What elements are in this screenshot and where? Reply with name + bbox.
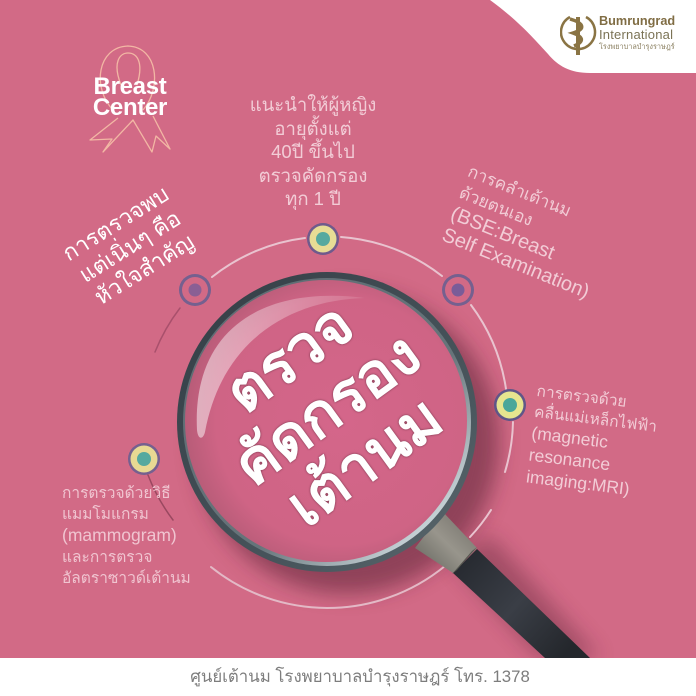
handle shadow (450, 535, 600, 658)
magnifier handle (415, 512, 590, 658)
text: early detection is key (58, 181, 199, 310)
text: mammogram (62, 484, 191, 587)
text: breast self examination: ด้วยตนเอง (457, 183, 536, 230)
text: breast self examination (439, 162, 592, 303)
bumrungrad logo: Bumrungrad (599, 14, 675, 28)
footer bar (0, 658, 696, 696)
text: MRI: คลื่นแม่เหล็กไฟฟ้า (533, 404, 658, 436)
white logo corner (490, 0, 696, 73)
footer bar: ศูนย์เต้านม โรงพยาบาลบำรุงราษฎร์ โทร. 1378 (190, 667, 530, 686)
node: top (307, 223, 339, 255)
node: lower left (128, 443, 160, 475)
breast center logo text: Center (93, 94, 167, 121)
text: mammogram: (mammogram) (62, 525, 177, 545)
lens drop shadow (195, 290, 499, 594)
main title in lens (213, 290, 454, 540)
text: MRI: imaging:MRI) (525, 466, 631, 499)
text: breast self examination: การคลำเต้านม (465, 162, 574, 221)
ribbon icon (90, 46, 170, 152)
text: breast self examination: Self Examination) (439, 224, 592, 303)
main title in lens: ตรวจ (213, 290, 365, 426)
text: breast self examination: (BSE:Breast (448, 203, 558, 264)
text: MRI: resonance (528, 445, 611, 474)
breast center logo text: Breast (94, 73, 166, 100)
dotted ring arcs (148, 237, 513, 608)
text: annual screening advice: แนะนำให้ผู้หญิง (250, 94, 376, 115)
bumrungrad logo: International (599, 27, 673, 42)
text: mammogram: และการตรวจ (62, 549, 152, 566)
text: annual screening advice: ตรวจคัดกรอง (259, 164, 367, 186)
text: early detection is key: แต่เนิ่นๆ คือ (75, 206, 185, 287)
text: annual screening advice (250, 94, 376, 210)
bumrungrad logo: โรงพยาบาลบำรุงราษฎร์ (599, 42, 675, 51)
main title in lens: คัดกรอง (221, 320, 433, 499)
text: mammogram: แมมโมแกรม (62, 506, 149, 523)
magnifying lens (177, 272, 477, 572)
text: annual screening advice: อายุตั้งแต่ (274, 118, 352, 138)
text: MRI (525, 383, 658, 499)
bumrungrad logo (560, 14, 675, 55)
text: early detection is key: การตรวจพบ (58, 181, 173, 266)
text: early detection is key: หัวใจสำคัญ (90, 229, 199, 310)
node: upper right (442, 274, 474, 306)
text: annual screening advice: 40ปี ขึ้นไป (271, 141, 355, 162)
text: mammogram: การตรวจด้วยวิธี (62, 485, 171, 502)
text: mammogram: อัลตราซาวด์เต้านม (62, 570, 191, 587)
main title in lens: เต้านม (274, 383, 454, 540)
node: right (494, 389, 526, 421)
breast center logo text (93, 73, 167, 121)
node: upper left (179, 274, 211, 306)
text: MRI: (magnetic (530, 423, 609, 452)
text: annual screening advice: ทุก 1 ปี (285, 188, 341, 209)
text: MRI: การตรวจด้วย (536, 383, 628, 411)
